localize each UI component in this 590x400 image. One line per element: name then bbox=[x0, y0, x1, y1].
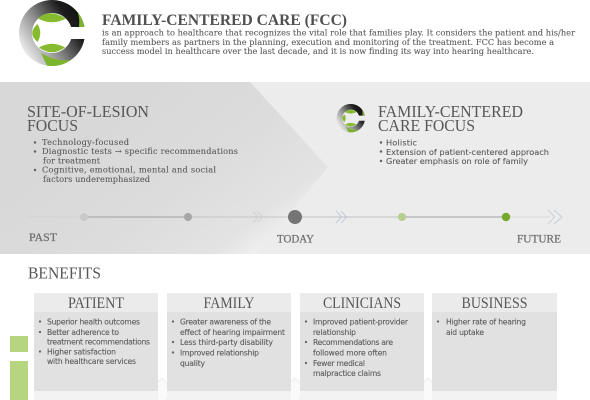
card heading: patient: PATIENT bbox=[68, 295, 124, 312]
list: family-centered care bbox=[380, 138, 549, 166]
intro text bbox=[102, 28, 575, 56]
panel: business bbox=[432, 293, 557, 400]
intro text: success model in healthcare over the last decade, and it is now finding its way into hearing healthcare. bbox=[102, 46, 534, 56]
list: business benefits: Higher rate of hearing bbox=[446, 318, 526, 326]
list: clinicians benefits bbox=[305, 318, 409, 378]
list: patient benefits: Higher satisfaction bbox=[47, 348, 116, 357]
list: site-of-lesion: Diagnostic tests → specific recommendations bbox=[42, 146, 238, 156]
label: past: PAST bbox=[29, 230, 58, 244]
heading: family-centered care focus: FAMILY-CENTERED bbox=[378, 102, 523, 121]
list: site-of-lesion: factors underemphasized bbox=[43, 174, 150, 184]
heading: site-of-lesion bbox=[27, 102, 149, 135]
panel: site-of-lesion focus bbox=[27, 102, 238, 184]
card heading: clinicians: CLINICIANS bbox=[323, 295, 401, 312]
arrow: chevrons 1 bbox=[253, 212, 262, 222]
panel: clinicians bbox=[300, 293, 424, 400]
intro text: is an approach to healthcare that recognizes the vital role that families play. It considers the patient and his/her bbox=[102, 28, 575, 38]
logo bbox=[19, 0, 84, 66]
decorative green blocks bbox=[10, 336, 28, 400]
card heading: business: BUSINESS bbox=[462, 295, 528, 312]
list: family-centered care: Holistic bbox=[386, 138, 417, 148]
intro text: family members as partners in the planning, execution and monitoring of the treatment. FCC has become a bbox=[102, 37, 554, 47]
heading: family-centered care focus bbox=[378, 102, 523, 135]
arrow: chevrons 3 bbox=[548, 210, 562, 224]
list: patient benefits bbox=[39, 318, 150, 366]
list: family benefits bbox=[172, 318, 285, 368]
list: clinicians benefits: followed more often bbox=[313, 348, 387, 358]
label: future: FUTURE bbox=[517, 232, 561, 246]
timeline bbox=[28, 210, 562, 224]
arrow: chevrons 2 bbox=[336, 211, 346, 223]
list: family benefits: Less third-party disability bbox=[180, 338, 274, 347]
panel: family bbox=[167, 293, 291, 400]
list: business benefits bbox=[437, 318, 526, 337]
list: family-centered care: Extension of patient-centered approach bbox=[386, 147, 549, 157]
list: patient benefits: Better adherence to bbox=[47, 328, 119, 337]
list: patient benefits: with healthcare services bbox=[47, 357, 136, 366]
title: FAMILY-CENTERED CARE (FCC) bbox=[102, 12, 347, 29]
heading: family-centered care focus: CARE FOCUS bbox=[378, 116, 475, 135]
list: family benefits: Greater awareness of the bbox=[180, 318, 271, 326]
list: family benefits: effect of hearing impairment bbox=[180, 328, 285, 337]
list: family-centered care: Greater emphasis on role of family bbox=[386, 156, 528, 166]
panel: comparison band bbox=[0, 82, 590, 254]
list: site-of-lesion: for treatment bbox=[43, 155, 101, 165]
list: family benefits: quality bbox=[180, 359, 206, 368]
timeline node: today bbox=[288, 210, 302, 224]
card heading: family: FAMILY bbox=[204, 295, 254, 312]
list: clinicians benefits: Fewer medical bbox=[313, 359, 365, 368]
faint diamonds between cards bbox=[149, 378, 441, 400]
list: clinicians benefits: Improved patient-provider bbox=[313, 318, 409, 326]
heading: benefits: BENEFITS bbox=[28, 264, 101, 282]
list: business benefits: aid uptake bbox=[446, 328, 484, 337]
timeline node: 1 bbox=[80, 213, 88, 221]
timeline node: 2 bbox=[184, 213, 192, 221]
list: patient benefits: Superior health outcomes bbox=[47, 318, 140, 326]
list: clinicians benefits: malpractice claims bbox=[313, 369, 381, 378]
list: site-of-lesion: Cognitive, emotional, mental and social bbox=[42, 164, 216, 174]
list: site-of-lesion bbox=[34, 137, 238, 184]
list: family benefits: Improved relationship bbox=[180, 348, 259, 358]
timeline node: 4 bbox=[502, 213, 510, 221]
heading: site-of-lesion: SITE-OF-LESION bbox=[27, 102, 149, 121]
list: clinicians benefits: relationship bbox=[313, 328, 356, 337]
icon: small logo bbox=[337, 104, 365, 132]
arrow: site-of-lesion panel bbox=[0, 82, 328, 254]
panel: family-centered care focus bbox=[337, 102, 549, 166]
label: today: TODAY bbox=[277, 232, 314, 246]
timeline node: 3 bbox=[398, 213, 406, 221]
list: patient benefits: treatment recommendations bbox=[47, 338, 150, 346]
heading: site-of-lesion: FOCUS bbox=[27, 116, 78, 135]
list: clinicians benefits: Recommendations are bbox=[313, 338, 393, 347]
list: site-of-lesion: Technology-focused bbox=[42, 137, 129, 147]
panel: patient bbox=[34, 293, 158, 400]
